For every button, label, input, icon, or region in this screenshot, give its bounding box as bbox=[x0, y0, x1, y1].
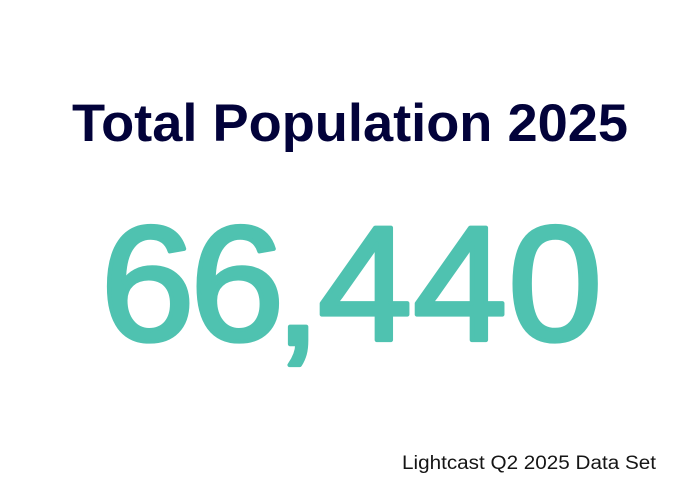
source note: Lightcast Q2 2025 Data Set bbox=[402, 453, 657, 474]
big number: total population: 66,440 bbox=[100, 193, 602, 379]
title: Total Population 2025 bbox=[72, 94, 628, 153]
